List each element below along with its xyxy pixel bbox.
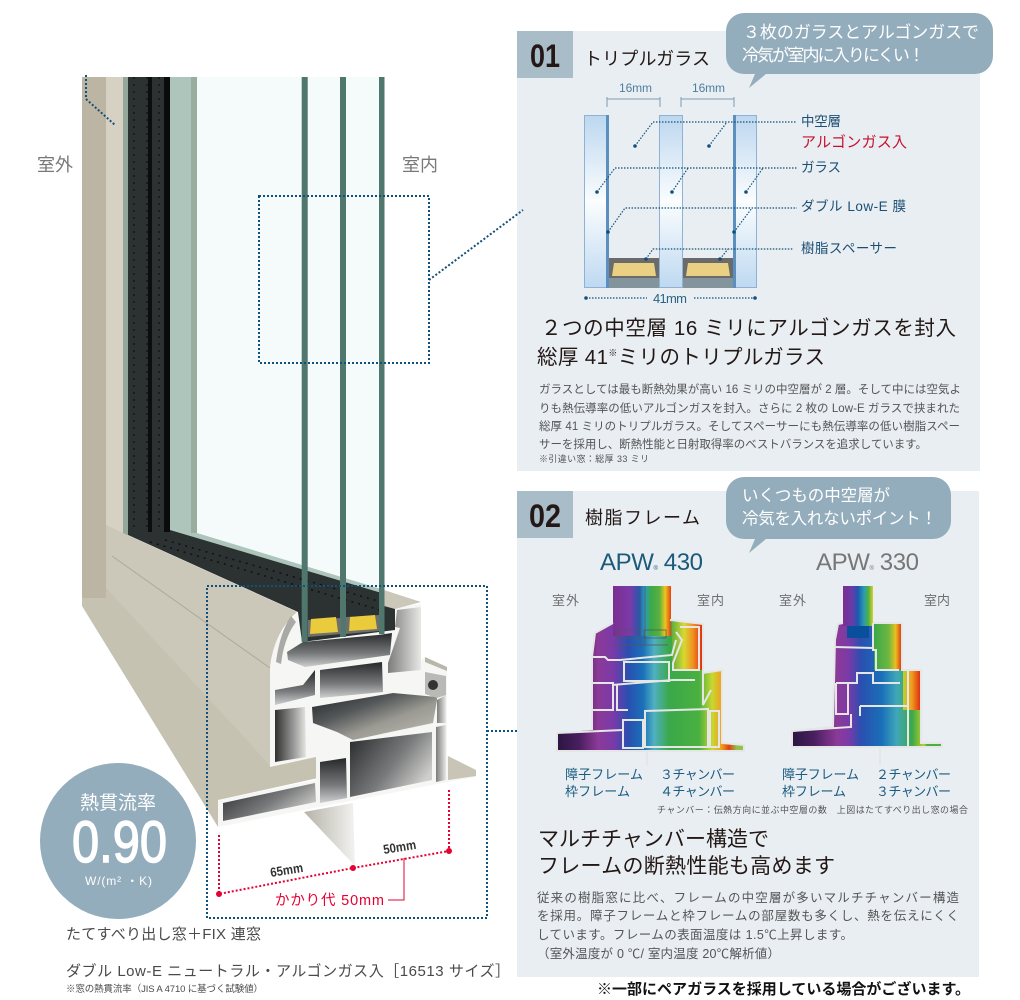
headline 02: マルチチャンバー構造で bbox=[538, 828, 769, 851]
T leg below the frame bbox=[304, 803, 355, 866]
badge: thermal transmittance bbox=[40, 763, 196, 919]
sill flange right bbox=[448, 756, 476, 780]
headline 01: ミリのトリプルガラス bbox=[618, 346, 825, 369]
product caption: ※窓の熱貫流率（JIS A 4710 に基づく試験値） bbox=[66, 983, 263, 995]
panel 02: resin frame bbox=[517, 477, 979, 977]
thermal chart: APW 430 bbox=[557, 586, 744, 765]
beige frame face bbox=[106, 525, 297, 765]
number tab 02 bbox=[517, 491, 573, 538]
APW 430 labels: 室外 bbox=[552, 593, 579, 608]
APW 430 labels bbox=[552, 593, 724, 608]
dark glazing band bbox=[128, 77, 395, 642]
spacers bbox=[609, 258, 733, 288]
chamber labels: 枠フレーム bbox=[565, 784, 630, 799]
chamber labels bbox=[565, 767, 951, 799]
red overlap dimension bbox=[216, 790, 452, 909]
badge: thermal transmittance: W/(m² ・K) bbox=[85, 874, 152, 888]
heading: triple glass: トリプルガラス bbox=[584, 49, 710, 69]
body text 01: ガラスとしては最も断熱効果が高い 16 ミリの中空層が 2 層。そして中には空気よ bbox=[539, 382, 961, 396]
badge: thermal transmittance: 0.90 bbox=[72, 810, 167, 875]
speech bubble bbox=[726, 477, 951, 553]
dotted pointer: outer frame bbox=[86, 75, 115, 125]
speech bubble: ３枚のガラスとアルゴンガスで bbox=[743, 22, 979, 42]
41mm dimension: 41mm bbox=[653, 291, 687, 306]
speech bubble: 冷気が室内に入りにくい！ bbox=[742, 46, 925, 65]
chamber note: チャンバー：伝熱方向に並ぶ中空層の数 上図はたてすべり出し窓の場合 bbox=[657, 804, 968, 815]
APW 430 labels: 室内 bbox=[697, 593, 724, 608]
glass section diagram bbox=[584, 81, 797, 306]
headline 01 bbox=[537, 317, 956, 369]
APW 330 labels bbox=[779, 593, 950, 608]
outer wall reveal bbox=[82, 77, 106, 598]
diagram labels: 樹脂スペーサー bbox=[801, 241, 897, 256]
headline 02: フレームの断熱性能も高めます bbox=[538, 855, 835, 878]
body text 02: を採用。障子フレームと枠フレームの部屋数も多くし、熱を伝えにくく bbox=[537, 908, 959, 923]
red overlap dimension: 65mm bbox=[269, 860, 304, 880]
number tab 02: 02 bbox=[529, 498, 561, 534]
right frame top surface bbox=[384, 590, 421, 609]
body text 01: サーを採用し、断熱性能と日射取得率のベストバランスを追求しています。 bbox=[539, 437, 927, 451]
body text 02 bbox=[537, 890, 959, 961]
chamber labels: 障子フレーム bbox=[565, 767, 643, 782]
chamber labels: ４チャンバー bbox=[660, 784, 735, 799]
thermal chart: APW 330 bbox=[792, 586, 942, 765]
number tab 01: 01 bbox=[530, 38, 560, 74]
profile chambers bbox=[223, 607, 446, 821]
chamber labels: 枠フレーム bbox=[782, 784, 846, 799]
body text 02: しています。フレームの表面温度は 1.5℃上昇します。 bbox=[537, 927, 853, 942]
41mm dimension bbox=[584, 291, 757, 306]
glass panes bbox=[584, 116, 756, 288]
APW 330 labels: 室外 bbox=[779, 593, 806, 608]
logo: APW 330: APW® 330 bbox=[816, 549, 919, 576]
leader lines bbox=[597, 122, 797, 259]
chamber labels: ３チャンバー bbox=[660, 767, 735, 782]
triple glass panes bbox=[302, 77, 384, 642]
product caption: たてすべり出し窓＋FIX 連窓 bbox=[66, 926, 261, 943]
label: outdoor: 室外 bbox=[37, 155, 73, 175]
headline 01: ※ bbox=[608, 348, 617, 358]
footnote: ※一部にペアガラスを採用している場合がございます。 bbox=[597, 980, 970, 998]
speech bubble: 冷気を入れないポイント！ bbox=[742, 509, 937, 528]
frame light strip bbox=[106, 77, 123, 537]
dotted callout box: frame bbox=[207, 586, 517, 918]
product caption bbox=[66, 926, 510, 995]
diagram labels: アルゴンガス入 bbox=[801, 133, 907, 151]
16mm dimensions bbox=[607, 81, 734, 107]
body text 02: 従来の樹脂窓に比べ、フレームの中空層が多いマルチチャンバー構造 bbox=[537, 890, 959, 905]
dotted callout box: glass bbox=[259, 196, 523, 363]
body text 01: りも熱伝導率の低いアルゴンガスを封入。さらに 2 枚の Low-E ガラスで挟まれた bbox=[539, 401, 960, 415]
diagram labels: 中空層 bbox=[801, 114, 841, 129]
headline 02 bbox=[538, 828, 835, 878]
red overlap dimension: 50mm bbox=[382, 837, 417, 857]
chamber labels: ３チャンバー bbox=[876, 784, 951, 799]
diagram labels: ガラス bbox=[801, 160, 841, 175]
APW 330 labels: 室内 bbox=[924, 593, 950, 608]
diagram labels bbox=[801, 114, 907, 256]
badge: thermal transmittance: 熱貫流率 bbox=[80, 792, 156, 814]
panel 01: triple glass bbox=[517, 13, 993, 471]
body text 01: ※引違い窓：総厚 33 ミリ bbox=[539, 453, 649, 464]
number tab 01 bbox=[517, 31, 573, 78]
label: indoor: 室内 bbox=[402, 155, 438, 175]
body text 01: 総厚 41 ミリのトリプルガラス。そしてスペーサーにも熱伝導率の低い樹脂スペー bbox=[539, 419, 960, 433]
low-e coating edges bbox=[606, 115, 736, 288]
16mm dimensions: 16mm bbox=[692, 81, 725, 95]
green glazing bead bbox=[170, 77, 395, 600]
speech bubble bbox=[726, 13, 993, 88]
red overlap dimension: かかり代 50mm bbox=[275, 892, 384, 909]
window glass background bbox=[197, 77, 384, 597]
logo: APW 430: APW® 430 bbox=[600, 549, 703, 576]
chamber labels: 障子フレーム bbox=[782, 767, 859, 782]
heading: resin frame: 樹脂フレーム bbox=[585, 508, 700, 528]
speech bubble: いくつもの中空層が bbox=[742, 486, 890, 505]
chamber labels: ２チャンバー bbox=[876, 767, 951, 782]
product caption: ダブル Low-E ニュートラル・アルゴンガス入［16513 サイズ］ bbox=[66, 962, 510, 980]
body text 01 bbox=[539, 382, 961, 464]
white cross-section silhouette bbox=[218, 604, 476, 827]
headline 01: ２つの中空層 16 ミリにアルゴンガスを封入 bbox=[541, 317, 956, 340]
headline 01: 総厚 41 bbox=[537, 346, 608, 369]
window photograph cutaway bbox=[82, 77, 476, 866]
body text 02: （室外温度が 0 ℃/ 室内温度 20℃解析値） bbox=[537, 946, 780, 961]
diagram labels: ダブル Low-E 膜 bbox=[801, 198, 906, 214]
sill ledge bbox=[82, 585, 318, 827]
16mm dimensions: 16mm bbox=[619, 81, 652, 95]
